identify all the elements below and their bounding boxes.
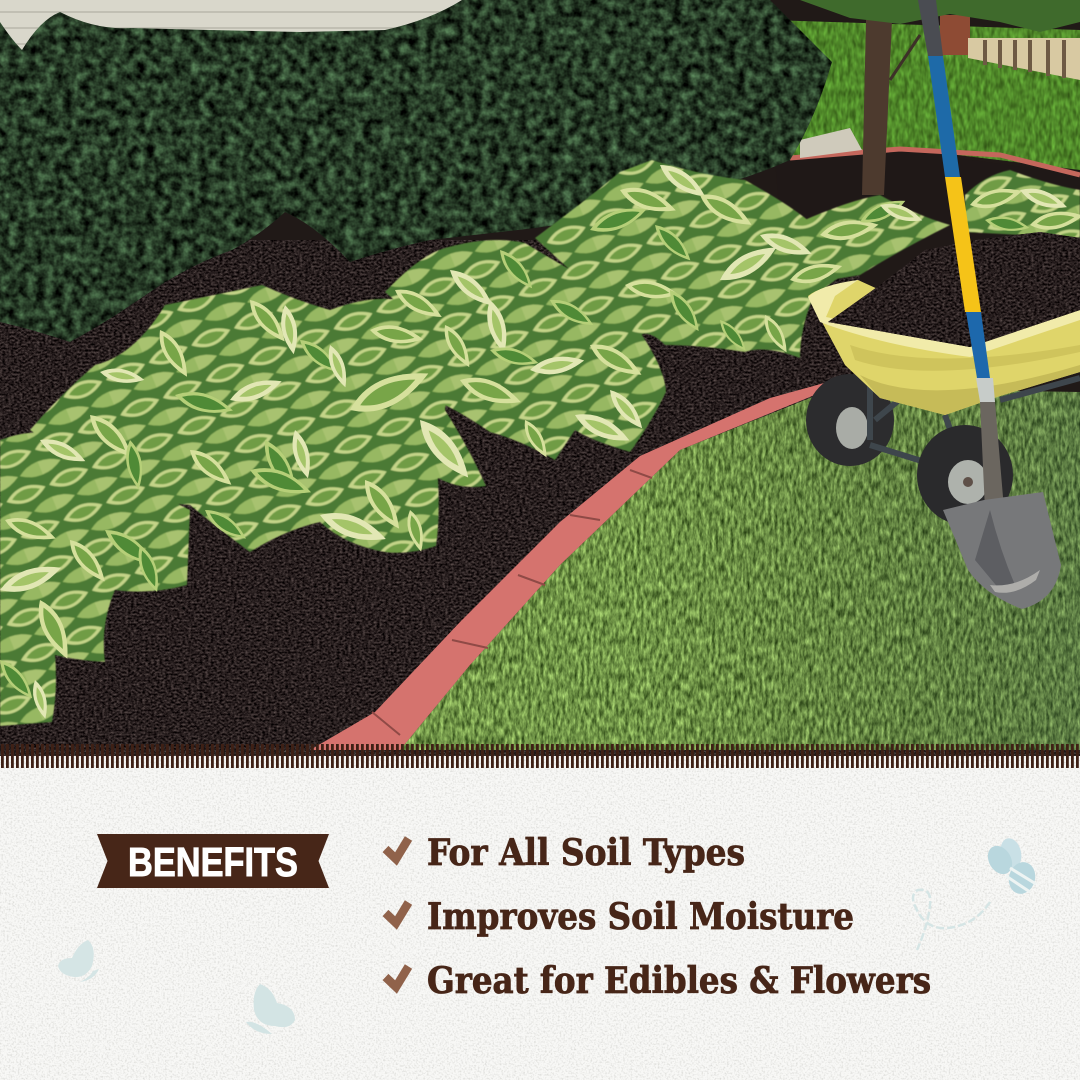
lawn xyxy=(400,391,1080,750)
icon: check mark 3 xyxy=(386,966,408,987)
benefit item 2: Improves Soil Moisture xyxy=(427,896,854,938)
icon: check mark 2 xyxy=(386,902,408,923)
house siding wall xyxy=(0,0,475,62)
wooden fence xyxy=(940,15,1080,80)
banner: benefits heading: BENEFITS xyxy=(128,839,298,885)
bee flight trail xyxy=(913,890,990,950)
fringe stripe border xyxy=(0,744,1080,768)
icon: check mark 1 xyxy=(386,838,408,859)
tray rim xyxy=(808,280,1080,357)
icon: bee xyxy=(983,836,1039,897)
dark green shrubs xyxy=(0,0,860,350)
mulch load xyxy=(828,232,1080,347)
photo: garden bed with wheelbarrow xyxy=(0,0,1080,780)
icon: butterfly left xyxy=(58,940,99,982)
shovel xyxy=(918,0,1061,609)
wheelbarrow xyxy=(806,232,1080,522)
panel: burlap cloth xyxy=(0,750,1080,1080)
wheel: rear xyxy=(806,374,894,466)
wheel: front xyxy=(917,425,1013,525)
far garden bed xyxy=(775,128,1080,240)
benefit item 1: For All Soil Types xyxy=(427,832,745,874)
benefit item 3: Great for Edibles & Flowers xyxy=(427,960,931,1002)
tree trunk and foliage xyxy=(800,0,1080,195)
hosta plants xyxy=(0,158,1080,726)
pink brick edging xyxy=(310,380,835,750)
mulch bed xyxy=(0,240,860,750)
tray xyxy=(808,280,1080,415)
brick joints xyxy=(372,470,652,735)
icon: butterfly lower xyxy=(246,984,295,1034)
wheelbarrow frame xyxy=(870,378,1080,462)
back lawn xyxy=(790,20,1080,170)
